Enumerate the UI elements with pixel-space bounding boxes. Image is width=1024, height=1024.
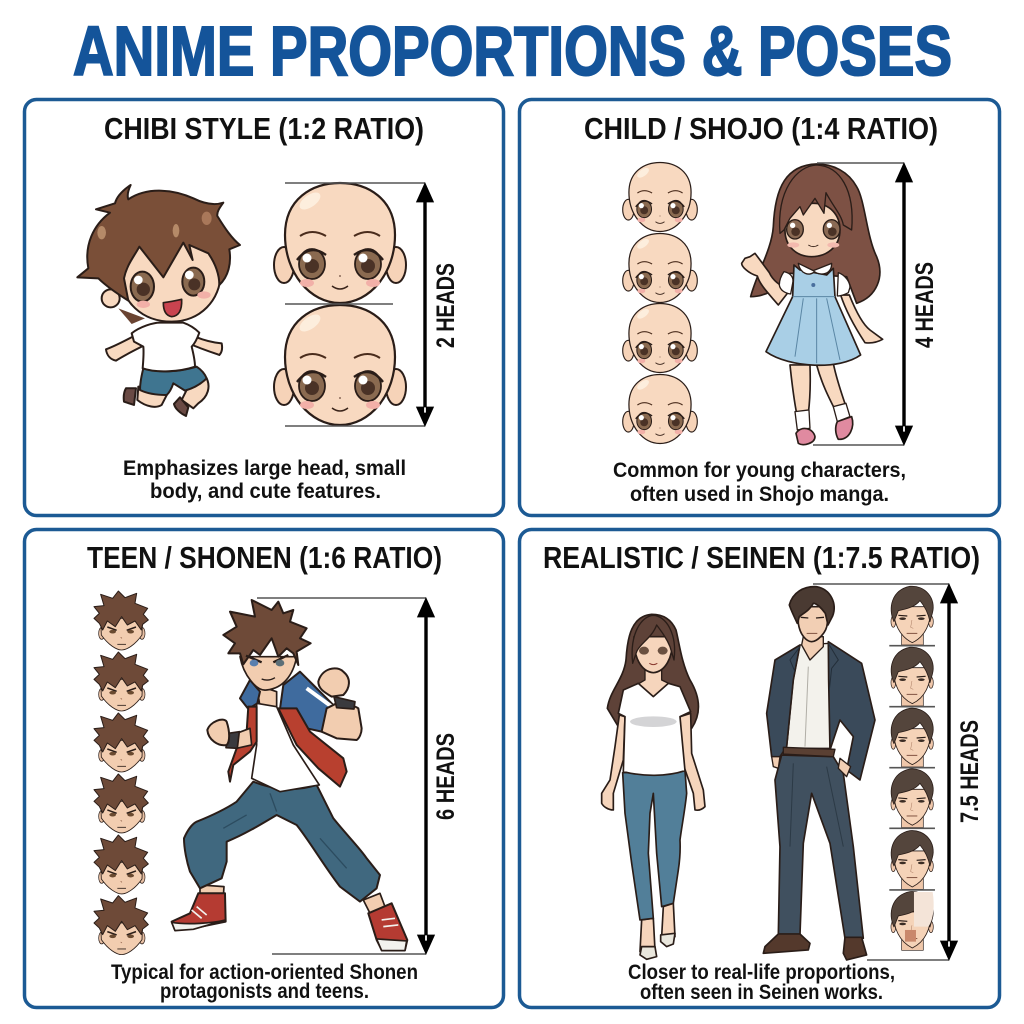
- height arrow: [416, 183, 434, 426]
- reference heads stack: [94, 591, 148, 955]
- measure label: 6 heads: 6 HEADS: [432, 733, 460, 820]
- panel: chibi style: [24, 100, 504, 516]
- woman figure: [602, 614, 705, 959]
- panel: realistic / seinen: [520, 530, 1000, 1008]
- chibi boy figure: [77, 185, 240, 416]
- height arrow: [940, 584, 958, 960]
- measure label: 4 heads: 4 HEADS: [911, 262, 939, 348]
- caption: shonen: protagonists and teens.: [160, 980, 369, 1003]
- caption: shojo: Common for young characters,: [613, 459, 906, 482]
- panel: teen / shonen: [24, 530, 504, 1008]
- measure label: 7.5 heads: 7.5 HEADS: [956, 720, 984, 823]
- panel: child / shojo: [520, 100, 1000, 516]
- measure label: 2 heads: 2 HEADS: [432, 263, 460, 348]
- man figure: [763, 587, 875, 960]
- height arrow: [896, 163, 912, 445]
- heading: shonen: TEEN / SHONEN (1:6 RATIO): [87, 540, 442, 575]
- height arrow: [418, 598, 434, 954]
- measure guides: [813, 584, 949, 960]
- girl figure: [742, 164, 883, 445]
- measure guides: [257, 598, 426, 954]
- reference heads stack: [623, 162, 697, 444]
- caption: shojo: often used in Shojo manga.: [630, 483, 889, 506]
- caption: seinen: often seen in Seinen works.: [640, 981, 883, 1004]
- reference heads stack: [274, 183, 406, 425]
- measure guides: [285, 183, 425, 426]
- measure guides: [813, 163, 904, 445]
- caption: seinen: Closer to real-life proportions,: [628, 961, 895, 984]
- caption: chibi: Emphasizes large head, small: [123, 457, 406, 480]
- fighter figure: [172, 600, 407, 951]
- heading: shojo: CHILD / SHOJO (1:4 RATIO): [584, 111, 938, 146]
- caption: shonen: Typical for action-oriented Shonen: [111, 961, 418, 984]
- heading: chibi: CHIBI STYLE (1:2 RATIO): [104, 111, 424, 146]
- reference heads stack: [889, 586, 935, 950]
- caption: chibi: body, and cute features.: [150, 480, 381, 503]
